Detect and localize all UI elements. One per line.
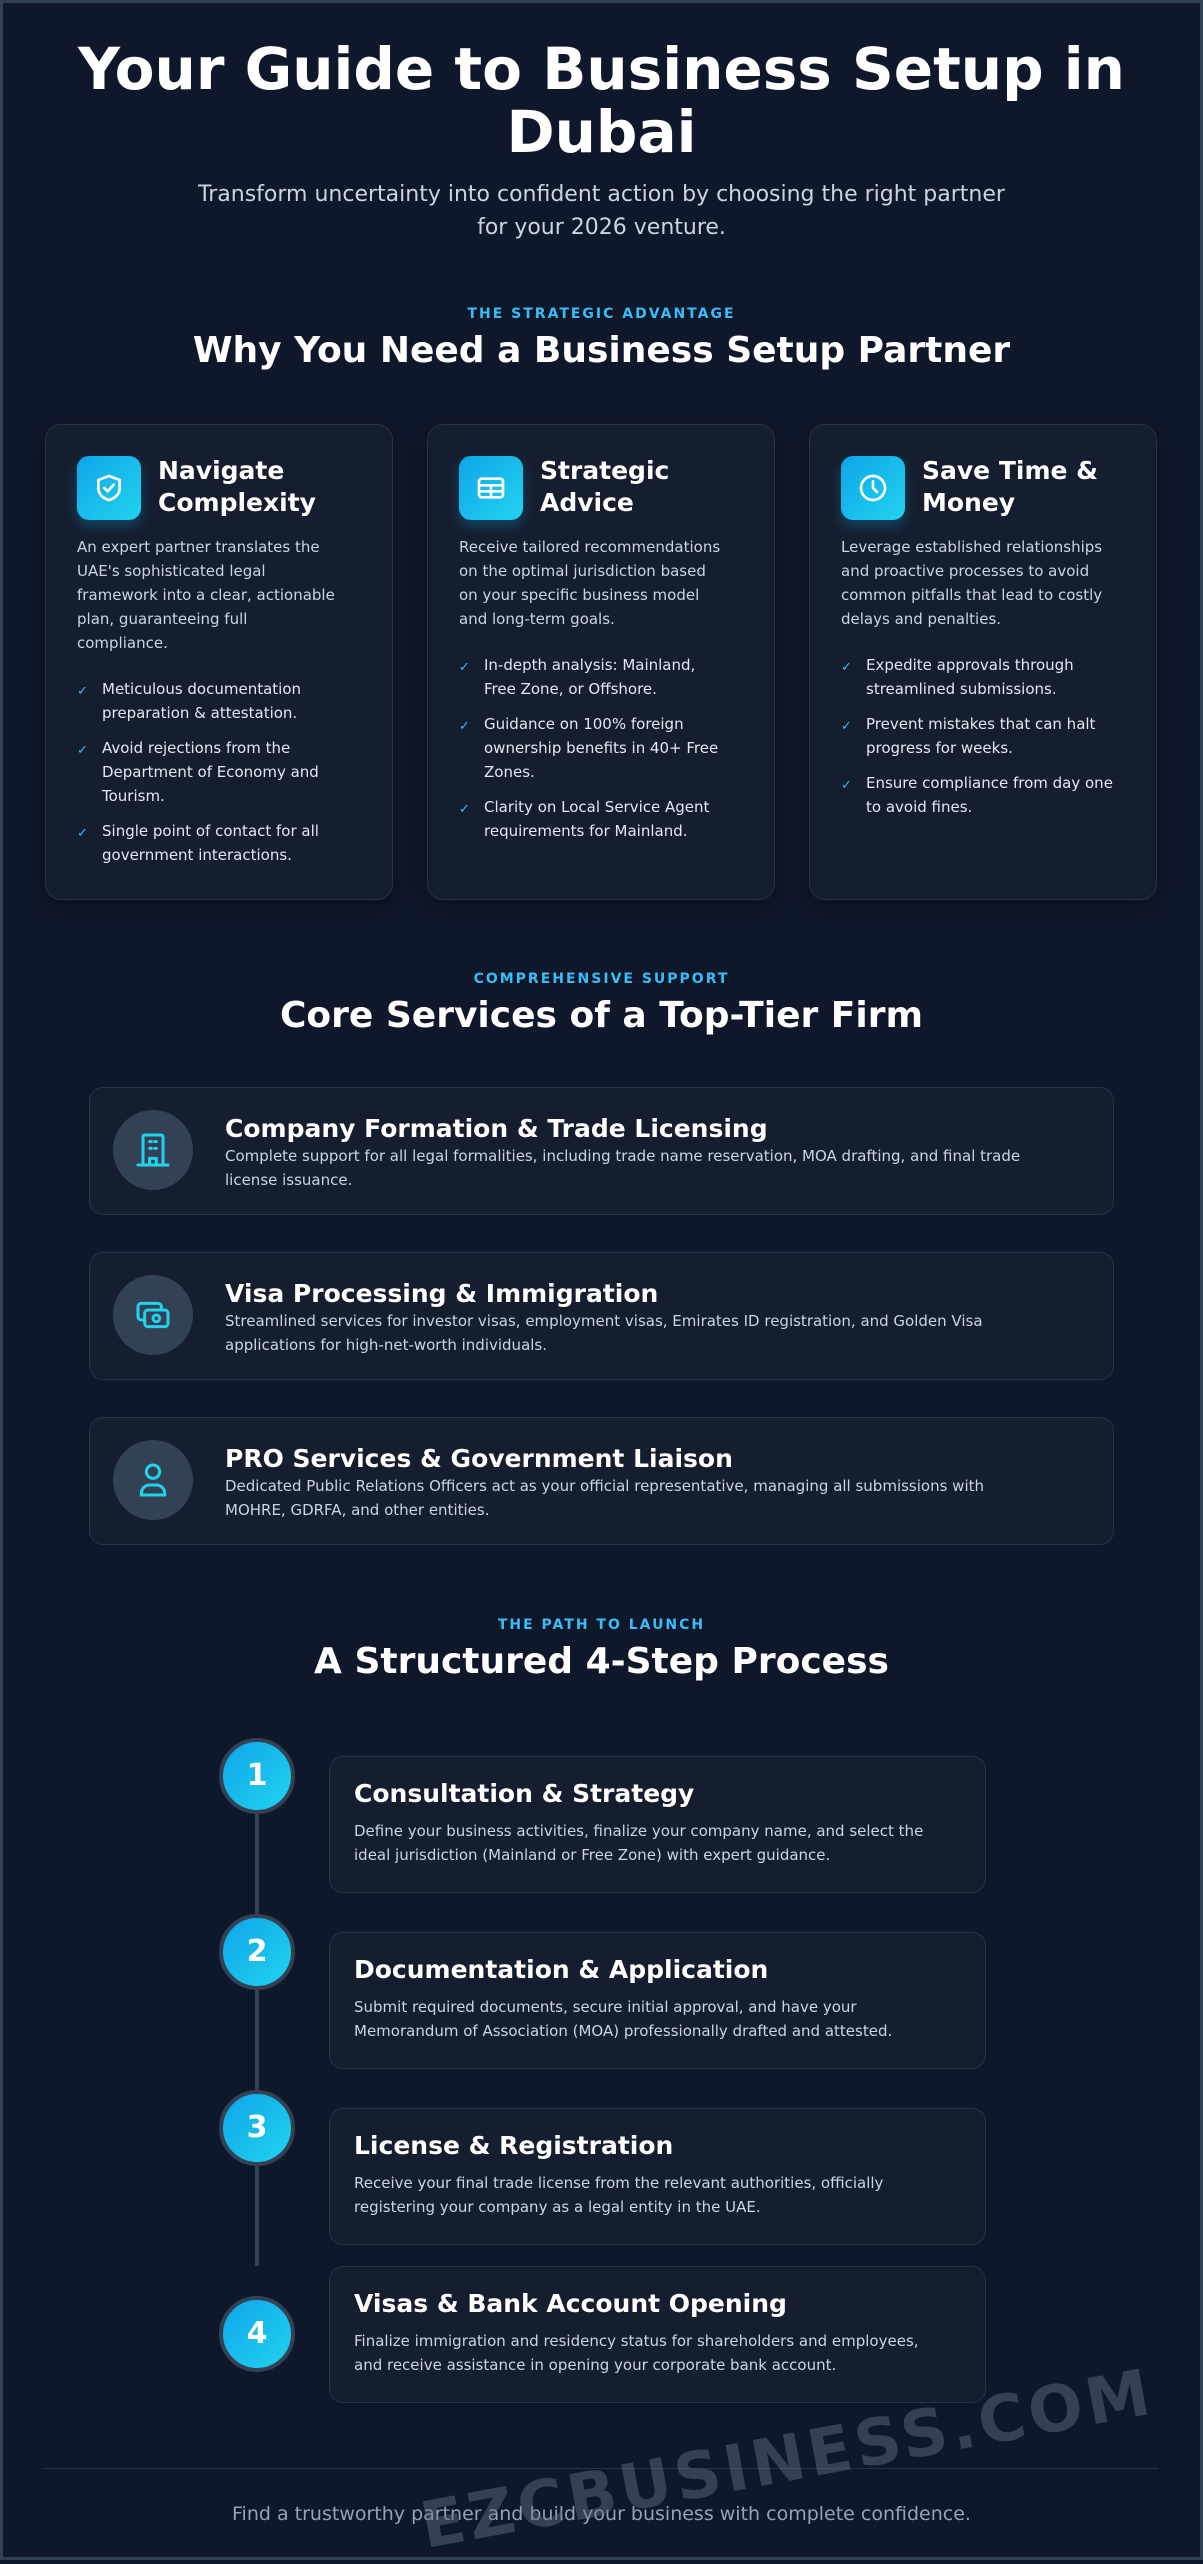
service title: Visa Processing & Immigration (225, 1279, 658, 1308)
checklist (461, 656, 718, 840)
card description: and long-term goals. (459, 610, 615, 628)
kicker: path to launch: THE PATH TO LAUNCH (498, 1617, 705, 1633)
checklist: Meticulous documentation preparation & attestation. (102, 680, 301, 722)
panel: save time & money (809, 424, 1157, 900)
card description (77, 538, 335, 652)
checklist: Expedite approvals through streamlined submissions. (866, 656, 1074, 698)
step 3 card (329, 2108, 986, 2245)
checklist: Ensure compliance from day one to avoid fines. (866, 774, 1113, 816)
step 2 card (329, 1932, 986, 2069)
card description: compliance. (77, 634, 168, 652)
kicker: strategic advantage: THE STRATEGIC ADVANTAGE (467, 306, 736, 322)
step 1 card (329, 1756, 986, 1893)
checklist: Single point of contact for all government interactions. (102, 822, 319, 864)
service description: MOHRE, GDRFA, and other entities. (225, 1501, 489, 1519)
card description: and proactive processes to avoid (841, 562, 1089, 580)
step description: Receive your final trade license from the relevant authorities, officially registering your company as a legal entity in the UAE. (354, 2174, 883, 2216)
card description (459, 538, 720, 628)
watermark: EZCBUSINESS.COM (415, 2356, 1160, 2564)
timeline line (255, 1810, 259, 2266)
icon: shield (77, 456, 141, 520)
card description: on your specific business model (459, 586, 699, 604)
step 3 number: 3 (247, 2110, 267, 2145)
footer text: Find a trustworthy partner and build your business with complete confidence. (232, 2503, 971, 2525)
step 4 number (219, 2296, 295, 2372)
step 3 number (219, 2090, 295, 2166)
step 4 card (329, 2266, 986, 2403)
card title (540, 456, 669, 517)
service title: PRO Services & Government Liaison (225, 1444, 733, 1473)
service description: Streamlined services for investor visas, employment visas, Emirates ID registration, and Golden Visa applications for high-net-worth individuals. (225, 1312, 983, 1354)
step 1 number: 1 (247, 1758, 267, 1793)
step 1 number (219, 1738, 295, 1814)
checklist: Avoid rejections from the Department of Economy and Tourism. (102, 739, 319, 805)
kicker: comprehensive support: COMPREHENSIVE SUPPORT (474, 971, 729, 987)
step title: Consultation & Strategy (354, 1779, 694, 1808)
heading: why partner: Why You Need a Business Setup Partner (193, 330, 1010, 371)
step 2 number: 2 (247, 1934, 267, 1969)
checklist (79, 680, 319, 864)
checklist: Guidance on 100% foreign ownership benefits in 40+ Free Zones. (484, 715, 718, 781)
step description: Submit required documents, secure initial approval, and have your Memorandum of Association (MOA) professionally drafted and attested. (354, 1998, 892, 2040)
step title: License & Registration (354, 2131, 673, 2160)
card description: An expert partner translates the (77, 538, 320, 556)
card description: plan, guaranteeing full (77, 610, 247, 628)
card title (158, 456, 316, 517)
title (78, 35, 1125, 166)
service title: Company Formation & Trade Licensing (225, 1114, 768, 1143)
subtitle: Transform uncertainty into confident action by choosing the right partner (198, 182, 1005, 207)
subtitle: for your 2026 venture. (477, 215, 726, 240)
checklist: In-depth analysis: Mainland, Free Zone, or Offshore. (484, 656, 695, 698)
card description: common pitfalls that lead to costly (841, 586, 1102, 604)
card description: delays and penalties. (841, 610, 1001, 628)
panel: strategic advice (427, 424, 775, 900)
title: Dubai (506, 98, 696, 166)
service description: Dedicated Public Relations Officers act as your official representative, managing all submissions with (225, 1477, 984, 1495)
step description: Define your business activities, finalize your company name, and select the ideal jurisdiction (Mainland or Free Zone) with expert guidance. (354, 1822, 923, 1864)
service: visa processing (89, 1252, 1114, 1380)
card description: UAE's sophisticated legal (77, 562, 266, 580)
card description: Receive tailored recommendations (459, 538, 720, 556)
checklist (843, 656, 1113, 816)
service description (225, 1477, 984, 1519)
card title: Advice (540, 488, 634, 517)
card title (922, 456, 1098, 517)
step 2 number (219, 1914, 295, 1990)
checklist: Prevent mistakes that can halt progress for weeks. (866, 715, 1095, 757)
card description: framework into a clear, actionable (77, 586, 335, 604)
service: company formation (89, 1087, 1114, 1215)
step title: Documentation & Application (354, 1955, 768, 1984)
card description: on the optimal jurisdiction based (459, 562, 706, 580)
step 4 number: 4 (247, 2316, 267, 2351)
heading: 4-step process: A Structured 4-Step Process (314, 1641, 889, 1682)
icon: building (113, 1110, 193, 1190)
step title: Visas & Bank Account Opening (354, 2289, 787, 2318)
icon: clock (841, 456, 905, 520)
card description: Leverage established relationships (841, 538, 1102, 556)
checklist: Clarity on Local Service Agent requirements for Mainland. (484, 798, 709, 840)
step description: Finalize immigration and residency status for shareholders and employees, and receive assistance in opening your corporate bank account. (354, 2332, 919, 2374)
panel: navigate complexity (45, 424, 393, 900)
icon: table (459, 456, 523, 520)
card title: Save Time & (922, 456, 1098, 485)
heading: core services: Core Services of a Top-Tier Firm (280, 995, 923, 1036)
card description (841, 538, 1102, 628)
service description: Complete support for all legal formalities, including trade name reservation, MOA drafting, and final trade license issuance. (225, 1147, 1020, 1189)
card title: Money (922, 488, 1015, 517)
card title: Navigate (158, 456, 284, 485)
icon: cash (113, 1275, 193, 1355)
card title: Strategic (540, 456, 669, 485)
icon: user (113, 1440, 193, 1520)
title: Your Guide to Business Setup in (78, 35, 1125, 103)
service: pro services (89, 1417, 1114, 1545)
card title: Complexity (158, 488, 316, 517)
subtitle (198, 182, 1005, 240)
